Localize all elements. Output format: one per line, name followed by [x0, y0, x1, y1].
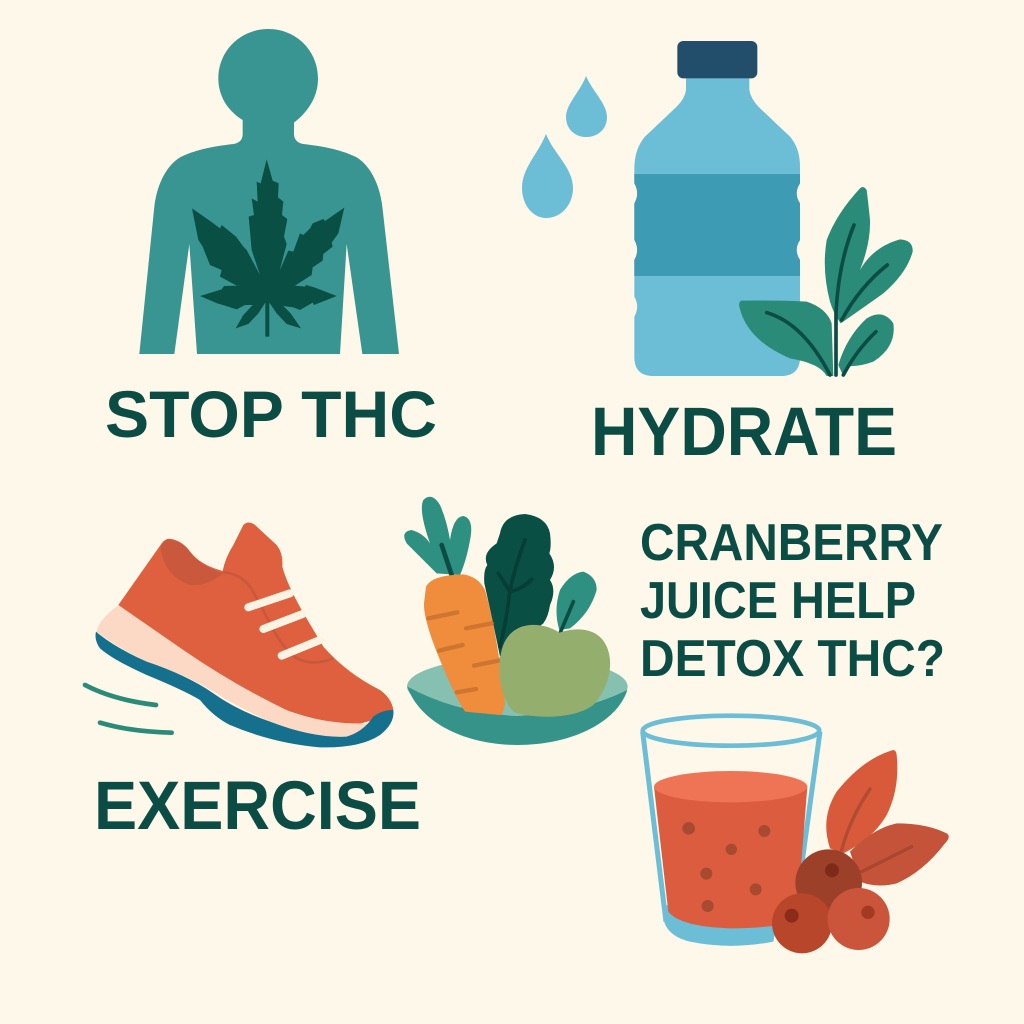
icon: water bottle [634, 41, 800, 376]
small leaf [556, 572, 597, 630]
juice [654, 787, 807, 928]
heading: stop thc: STOP THC [105, 377, 437, 451]
shoe laces [248, 593, 320, 656]
heading: cranberry question: JUICE HELP [640, 572, 916, 630]
shoe midsole [97, 605, 370, 737]
glass sides [643, 732, 820, 922]
bottle cap [677, 41, 757, 78]
heading: cranberry question: CRANBERRY [640, 514, 943, 572]
icon: green leaves [739, 187, 913, 376]
heading: cranberry question [640, 514, 945, 688]
bowl front [407, 687, 627, 745]
shoe collar shade [161, 539, 223, 585]
body silhouette [139, 29, 399, 354]
motion lines [85, 685, 172, 733]
carrot [424, 574, 505, 715]
bottle label band [634, 174, 800, 276]
shoe upper [118, 522, 393, 725]
cranberries [795, 849, 862, 916]
glass base [663, 905, 778, 946]
cannabis leaf [192, 159, 344, 337]
shoe outsole [95, 632, 393, 747]
leafy green vein [498, 540, 532, 647]
apple [499, 625, 610, 717]
dark leafy green [484, 514, 554, 657]
icon: water drops [522, 76, 607, 218]
icon: human body with cannabis leaf [139, 29, 399, 354]
heading: exercise: EXERCISE [94, 767, 421, 844]
icon: bowl of vegetables [404, 497, 628, 745]
juice surface [654, 771, 807, 802]
heading: hydrate: HYDRATE [591, 393, 897, 470]
cranberry leaves [826, 750, 897, 853]
shoe tongue line [223, 572, 333, 662]
juice bubbles [682, 822, 770, 912]
icon: running shoe [85, 522, 393, 747]
glass rim [643, 716, 819, 746]
carrot greens [404, 497, 471, 575]
heading: cranberry question: DETOX THC? [640, 630, 945, 688]
bottle body [634, 78, 800, 376]
bowl back rim [407, 657, 628, 717]
icon: glass of cranberry juice [643, 716, 949, 953]
